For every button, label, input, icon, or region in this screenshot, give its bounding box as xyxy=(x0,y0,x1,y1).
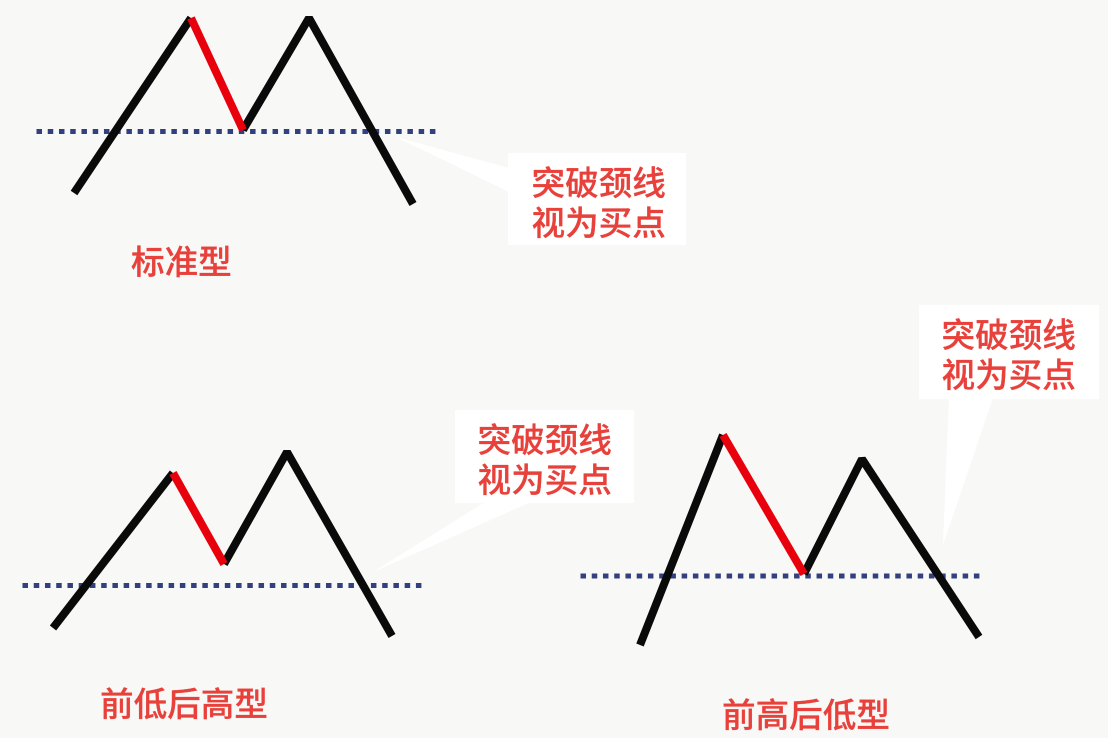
pattern line right: standard xyxy=(243,18,413,204)
panel: high-then-low chart xyxy=(580,305,1099,735)
panel: low-then-high chart xyxy=(22,410,634,724)
callout pointer: high-then-low xyxy=(943,398,993,545)
label: high-then-low type: 前高后低型 xyxy=(722,697,890,735)
callout text: high-then-low: 视为买点 xyxy=(942,357,1076,395)
pattern line right: low-then-high xyxy=(224,452,392,636)
neckline: standard xyxy=(36,129,436,134)
callout pointer: low-then-high xyxy=(373,502,531,572)
callout text: low-then-high: 突破颈线 xyxy=(478,423,612,460)
callout text: low-then-high: 视为买点 xyxy=(478,462,612,500)
label: standard type: 标准型 xyxy=(131,244,232,282)
pattern line: standard xyxy=(74,18,191,193)
callout text: standard: 视为买点 xyxy=(532,205,666,243)
pattern line right: high-then-low xyxy=(804,459,979,637)
callout box: high-then-low xyxy=(919,305,1099,399)
callout text: standard: 突破颈线 xyxy=(532,166,666,203)
red segment: low-then-high xyxy=(173,473,224,564)
callout text: high-then-low: 突破颈线 xyxy=(942,318,1076,355)
pattern line: high-then-low xyxy=(640,435,723,645)
panel: standard double-pattern chart xyxy=(36,18,686,282)
callout pointer: standard xyxy=(396,137,509,192)
label: low-then-high type: 前低后高型 xyxy=(100,686,268,724)
red segment: standard xyxy=(191,18,243,130)
callout box: standard xyxy=(508,153,686,245)
neckline: low-then-high xyxy=(22,583,422,588)
pattern line: low-then-high xyxy=(53,473,173,628)
red segment: high-then-low xyxy=(723,435,804,574)
callout box: low-then-high xyxy=(455,410,634,503)
neckline: high-then-low xyxy=(580,574,980,578)
